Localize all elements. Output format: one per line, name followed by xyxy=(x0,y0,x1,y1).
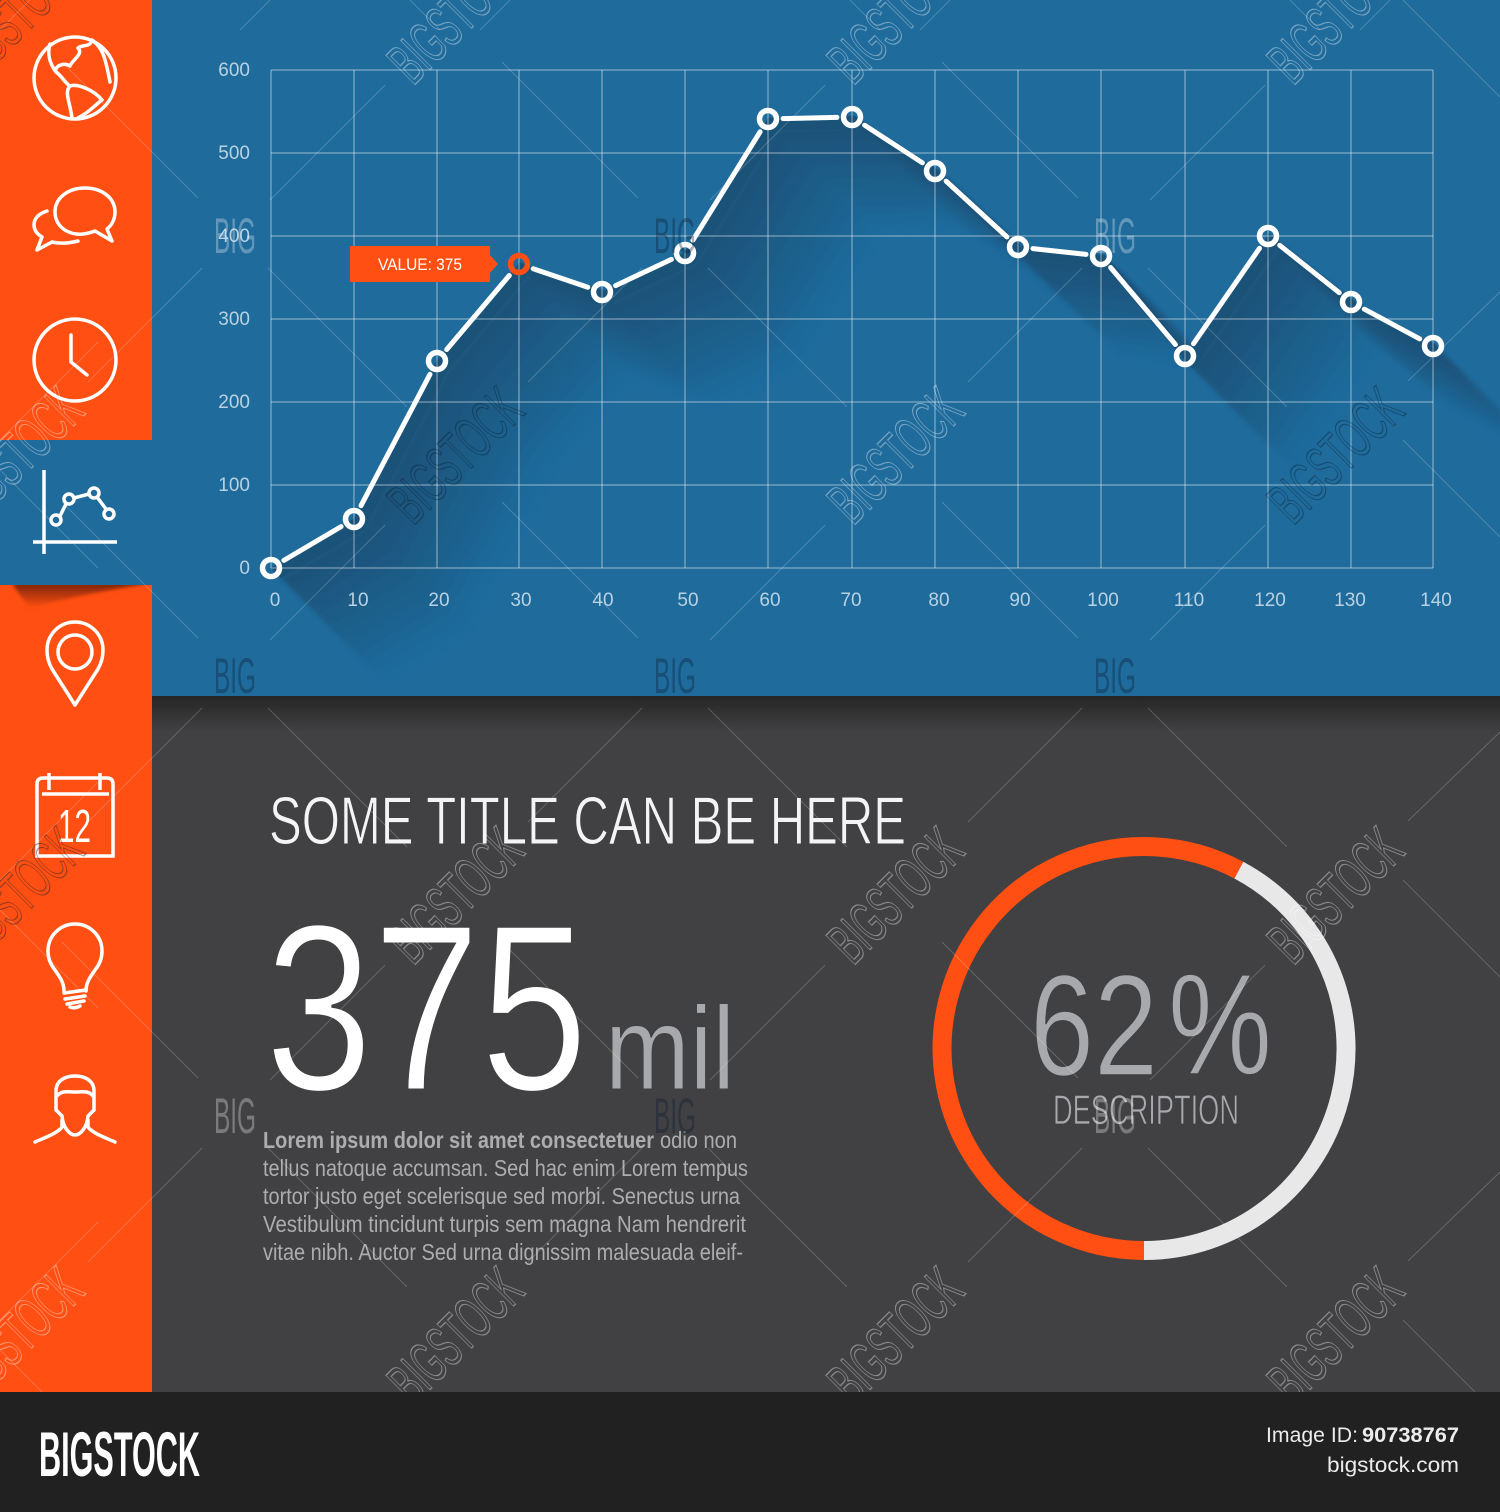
watermark overlay: BIGSTOCK xyxy=(375,815,536,976)
big number: 375: 375 xyxy=(265,876,588,1141)
watermark overlay: BIGSTOCK xyxy=(815,375,976,536)
y axis labels: 500 xyxy=(218,143,250,164)
x axis labels: 120 xyxy=(1254,590,1286,611)
text block: lorem ipsum paragraph: tortor justo eget scelerisque sed morbi. Senectus urna xyxy=(263,1183,740,1209)
icon: clock xyxy=(34,319,116,401)
y axis labels: 400 xyxy=(218,226,250,247)
watermark overlay: BIG xyxy=(654,648,696,704)
y axis labels: 200 xyxy=(218,392,250,413)
watermark overlay: BIGSTOCK xyxy=(375,1255,536,1416)
donut value: 62: 62 xyxy=(1030,945,1158,1106)
y axis labels: 100 xyxy=(218,475,250,496)
watermark overlay: BIG xyxy=(214,1088,256,1144)
icon: speech bubbles xyxy=(34,188,115,250)
watermark overlay: BIGSTOCK xyxy=(815,815,976,976)
donut value: percent sign: % xyxy=(1168,944,1272,1105)
y axis labels: 300 xyxy=(218,309,250,330)
x axis labels: 80 xyxy=(928,590,950,611)
x axis labels: 70 xyxy=(840,590,862,611)
text block: lorem ipsum paragraph: odio non xyxy=(660,1127,737,1153)
x axis labels: 110 xyxy=(1174,590,1204,611)
y axis labels xyxy=(218,60,250,579)
x axis labels: 50 xyxy=(677,590,699,611)
icon: person xyxy=(35,1076,115,1142)
watermark overlay: BIG xyxy=(214,648,256,704)
watermark overlay: BIGSTOCK xyxy=(815,1255,976,1416)
watermark overlay: BIGSTOCK xyxy=(375,375,536,536)
donut description: DESCRIPTION xyxy=(1053,1086,1239,1133)
footer image id xyxy=(1266,1424,1459,1447)
watermark overlay: BIG xyxy=(1094,1088,1136,1144)
icon: line chart tab xyxy=(33,470,117,554)
x axis labels: 100 xyxy=(1087,590,1119,611)
footer site name: bigstock.com xyxy=(1327,1454,1459,1477)
x axis labels: 40 xyxy=(592,590,614,611)
x axis labels: 0 xyxy=(270,590,280,611)
text block: lorem ipsum paragraph: Lorem ipsum dolor sit amet consectetuer xyxy=(263,1127,654,1153)
watermark overlay: BIG xyxy=(214,208,256,264)
watermark overlay: BIG xyxy=(1094,648,1136,704)
footer image id: Image ID: xyxy=(1266,1424,1358,1447)
panel: blue chart panel xyxy=(152,0,1500,696)
x axis labels: 90 xyxy=(1009,590,1031,611)
tooltip: value 375 xyxy=(350,246,498,282)
heading: some title: SOME TITLE CAN BE HERE xyxy=(269,783,906,859)
x axis labels: 20 xyxy=(428,590,450,611)
text block: lorem ipsum paragraph: tellus natoque accumsan. Sed hac enim Lorem tempus xyxy=(263,1155,748,1181)
watermark overlay: BIG xyxy=(1094,208,1136,264)
footer image id: 90738767 xyxy=(1362,1424,1459,1447)
x axis labels: 140 xyxy=(1420,590,1452,611)
x axis labels xyxy=(270,590,1452,611)
watermark overlay: BIG xyxy=(654,1088,696,1144)
chart long shadow xyxy=(273,119,1500,680)
icon: calendar: 12 xyxy=(58,800,91,852)
text block: lorem ipsum paragraph: Vestibulum tincidunt turpis sem magna Nam hendrerit xyxy=(263,1211,747,1237)
watermark overlay: BIG xyxy=(654,208,696,264)
x axis labels: 10 xyxy=(347,590,369,611)
x axis labels: 30 xyxy=(510,590,532,611)
y axis labels: 600 xyxy=(218,60,250,81)
text block: lorem ipsum paragraph: vitae nibh. Auctor Sed urna dignissim malesuada eleif- xyxy=(263,1239,743,1265)
icon: globe xyxy=(34,37,116,119)
y axis labels: 0 xyxy=(239,558,250,579)
donut chart: 62 percent xyxy=(942,847,1346,1250)
x axis labels: 60 xyxy=(759,590,781,611)
unit: mil: mil xyxy=(605,983,735,1115)
x axis labels: 130 xyxy=(1334,590,1366,611)
panel: orange sidebar xyxy=(0,0,152,1392)
footer bar xyxy=(0,1392,1500,1512)
tooltip: value 375: VALUE: 375 xyxy=(378,255,462,274)
icon: light bulb xyxy=(48,924,102,1008)
icon: map pin xyxy=(47,622,103,705)
panel: dark lower panel xyxy=(152,696,1500,1392)
icon: calendar xyxy=(37,773,113,856)
text: BIGSTOCK xyxy=(39,1420,200,1490)
line chart series xyxy=(262,108,1442,576)
text block: lorem ipsum paragraph xyxy=(263,1127,748,1265)
